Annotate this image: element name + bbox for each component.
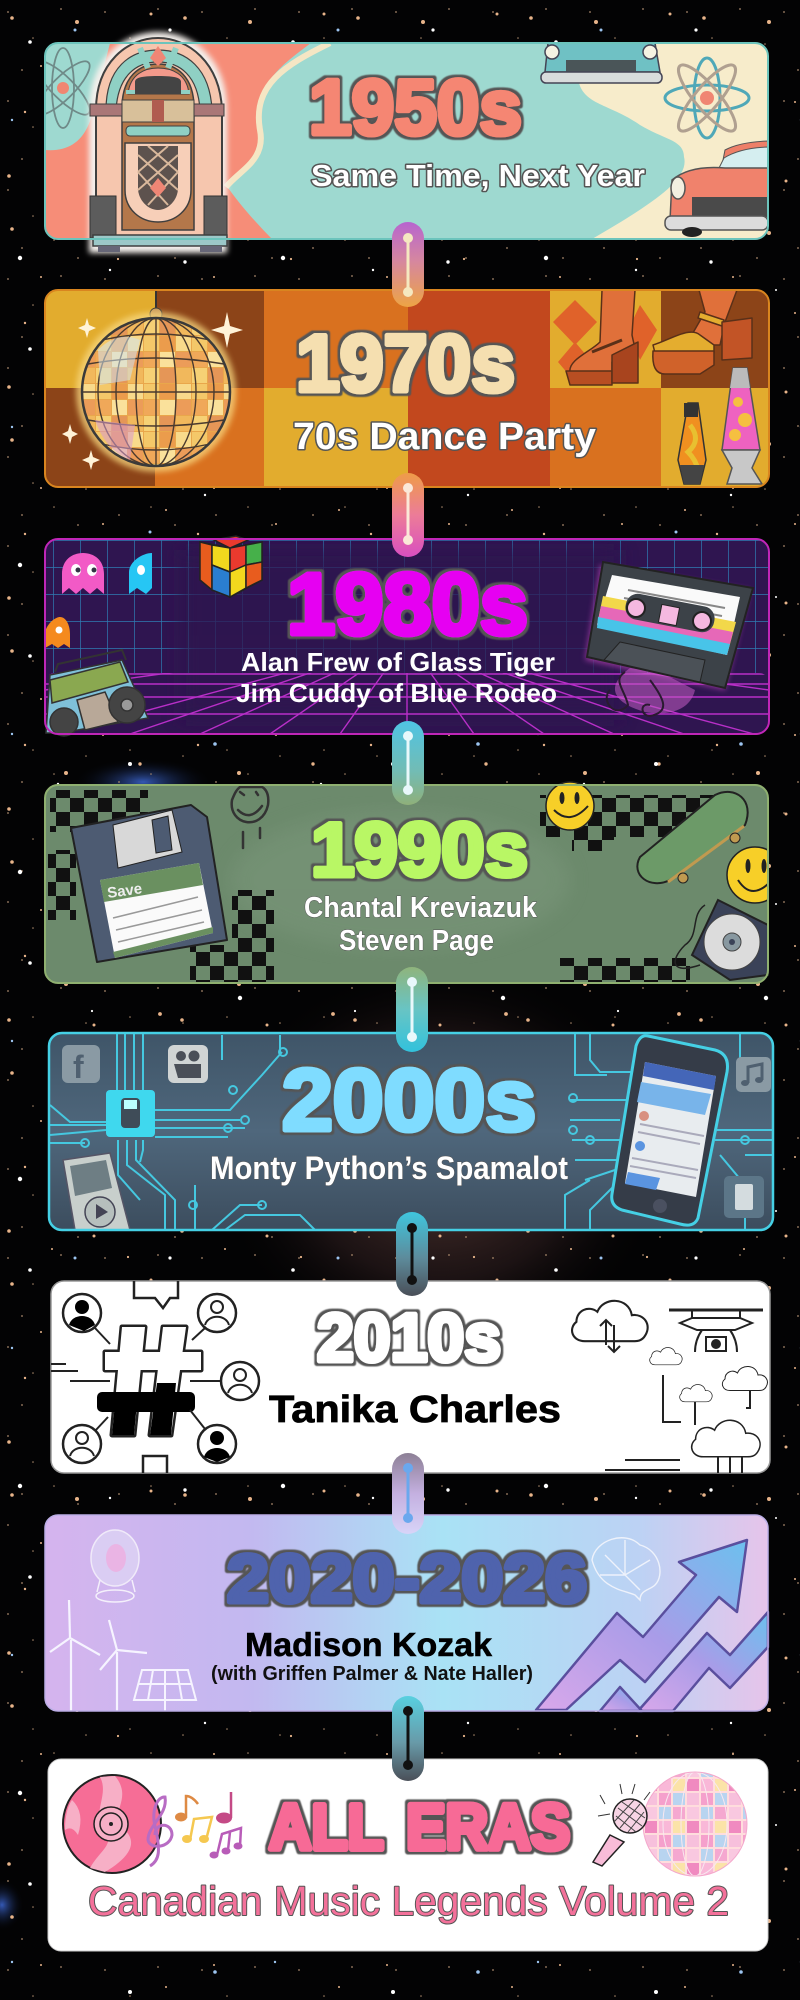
icon: MySpace tile xyxy=(168,1045,208,1083)
icon: person outline bottom-left xyxy=(63,1417,108,1463)
icon: solar panel xyxy=(134,1670,196,1711)
panel: 1990s xyxy=(45,782,783,983)
icon: microphone xyxy=(593,1784,650,1866)
1980s grid background xyxy=(45,539,769,734)
icon: brain xyxy=(592,1538,660,1600)
icon: left atom xyxy=(46,47,90,129)
icon: smiley outline xyxy=(232,787,268,848)
icon: floppy disk xyxy=(71,805,227,962)
subtitle: Canadian Music Legends Volume 2: Canadian Music Legends Volume 2 xyxy=(88,1878,729,1924)
performer: Jim Cuddy of Blue Rodeo: Jim Cuddy of Blue Rodeo xyxy=(236,678,557,708)
connector: 1950s to 1970s xyxy=(392,222,424,307)
icon: chip xyxy=(106,1090,155,1137)
icon: person dark bottom-right xyxy=(190,1410,236,1463)
icon: treble clef xyxy=(148,1797,172,1866)
heading: 1980s: 1980s xyxy=(287,556,528,653)
icon: wind turbines xyxy=(50,1600,147,1711)
icon: drone xyxy=(669,1310,763,1352)
2010s white background xyxy=(51,1281,770,1473)
icon: orange ghost xyxy=(45,617,70,648)
heading: 1970s: 1970s xyxy=(296,319,515,409)
icon: Rubik's cube xyxy=(200,536,262,597)
panel: 1970s xyxy=(45,290,769,487)
note: with Griffen Palmer and Nate Haller: (with Griffen Palmer & Nate Haller) xyxy=(211,1663,533,1685)
1950s panel background xyxy=(45,43,768,239)
performer: Chantal Kreviazuk: Chantal Kreviazuk xyxy=(304,892,538,924)
connector: 2020s to All Eras xyxy=(392,1696,424,1781)
performer: Alan Frew of Glass Tiger: Alan Frew of Glass Tiger xyxy=(241,647,555,677)
event: 70s Dance Party: 70s Dance Party xyxy=(293,416,596,458)
heading: 2010s: 2010s xyxy=(317,1300,501,1376)
2020s gradient background xyxy=(45,1515,768,1711)
connector: 1980s to 1990s xyxy=(392,721,424,805)
heading: 1950s: 1950s xyxy=(309,63,522,151)
icon: person outline top-right xyxy=(192,1294,236,1340)
panel border xyxy=(45,785,768,983)
icon: coral car xyxy=(665,141,768,237)
icon: vinyl record xyxy=(63,1775,161,1873)
icon: Facebook tile xyxy=(62,1045,100,1085)
All Eras white background xyxy=(48,1759,768,1951)
icon: hashtag xyxy=(97,1327,201,1435)
icon: CD and headphones cord xyxy=(675,900,768,980)
label on floppy: Save xyxy=(106,880,143,902)
icon: smartphone xyxy=(612,1036,728,1225)
panel: 2020-2026 xyxy=(45,1515,768,1711)
icon: cloud upload xyxy=(572,1301,648,1352)
icon: music tile xyxy=(736,1057,771,1092)
icon: person outline right xyxy=(190,1362,259,1400)
performer: Steven Page: Steven Page xyxy=(339,925,494,957)
connector: 2010s to 2020s xyxy=(392,1453,424,1534)
network people xyxy=(63,1294,259,1463)
icon: disco ball xyxy=(62,290,243,472)
icon: tablet tile xyxy=(724,1176,764,1218)
connector: 1990s to 2000s xyxy=(396,967,428,1052)
icon: crystal ball xyxy=(91,1530,139,1602)
panel: 2010s xyxy=(51,1281,770,1473)
2000s circuit background xyxy=(49,1033,773,1230)
icons: small clouds and trees xyxy=(605,1348,767,1473)
icon: rising arrow xyxy=(536,1540,768,1711)
icon: teal car xyxy=(541,43,662,83)
performer: Madison Kozak: Madison Kozak xyxy=(245,1626,493,1663)
panel border xyxy=(45,290,769,487)
icon: person dark top-left xyxy=(63,1294,110,1344)
performer: Tanika Charles: Tanika Charles xyxy=(269,1389,561,1431)
icon: yellow smiley right xyxy=(726,846,767,904)
1990s grunge background xyxy=(45,785,768,983)
connector: 2000s to 2010s xyxy=(396,1212,428,1296)
icon: jukebox xyxy=(90,35,227,252)
panel: 2000s xyxy=(49,1033,773,1230)
panel border xyxy=(45,539,769,734)
icon: skateboard xyxy=(637,792,748,883)
heading: 2000s: 2000s xyxy=(282,1052,536,1149)
icon: music notes xyxy=(175,1792,242,1858)
icon: pink disco ball xyxy=(643,1772,747,1876)
panel border xyxy=(45,43,768,239)
panel border xyxy=(45,1515,768,1711)
icon: speech bubbles xyxy=(134,1281,178,1473)
1970s checker background xyxy=(45,290,769,487)
event: Monty Python's Spamalot: Monty Python’s Spamalot xyxy=(210,1150,568,1186)
icon: iPod xyxy=(63,1153,130,1230)
heading: 2020-2026: 2020-2026 xyxy=(227,1541,587,1617)
icon: platform shoes xyxy=(566,290,752,385)
panel: All Eras xyxy=(48,1759,768,1951)
panel: 1980s xyxy=(45,536,769,736)
icon: lava lamps xyxy=(678,368,762,484)
icon: Facebook tile: f xyxy=(73,1049,84,1085)
event: Same Time, Next Year: Same Time, Next Year xyxy=(311,158,645,193)
icon: right atom xyxy=(665,58,749,138)
panel border xyxy=(49,1033,773,1230)
icon: cassette tape xyxy=(585,562,753,716)
heading: 1990s: 1990s xyxy=(311,808,528,893)
connector: 1970s to 1980s xyxy=(392,473,424,557)
heading: ALL ERAS: ALL ERAS xyxy=(269,1791,570,1863)
icon: yellow smiley top xyxy=(546,782,594,830)
icon: pink ghost xyxy=(62,553,104,594)
icon: cyan ghost xyxy=(129,553,152,594)
icon: boombox xyxy=(46,650,148,736)
panel: 1950s xyxy=(30,35,768,252)
